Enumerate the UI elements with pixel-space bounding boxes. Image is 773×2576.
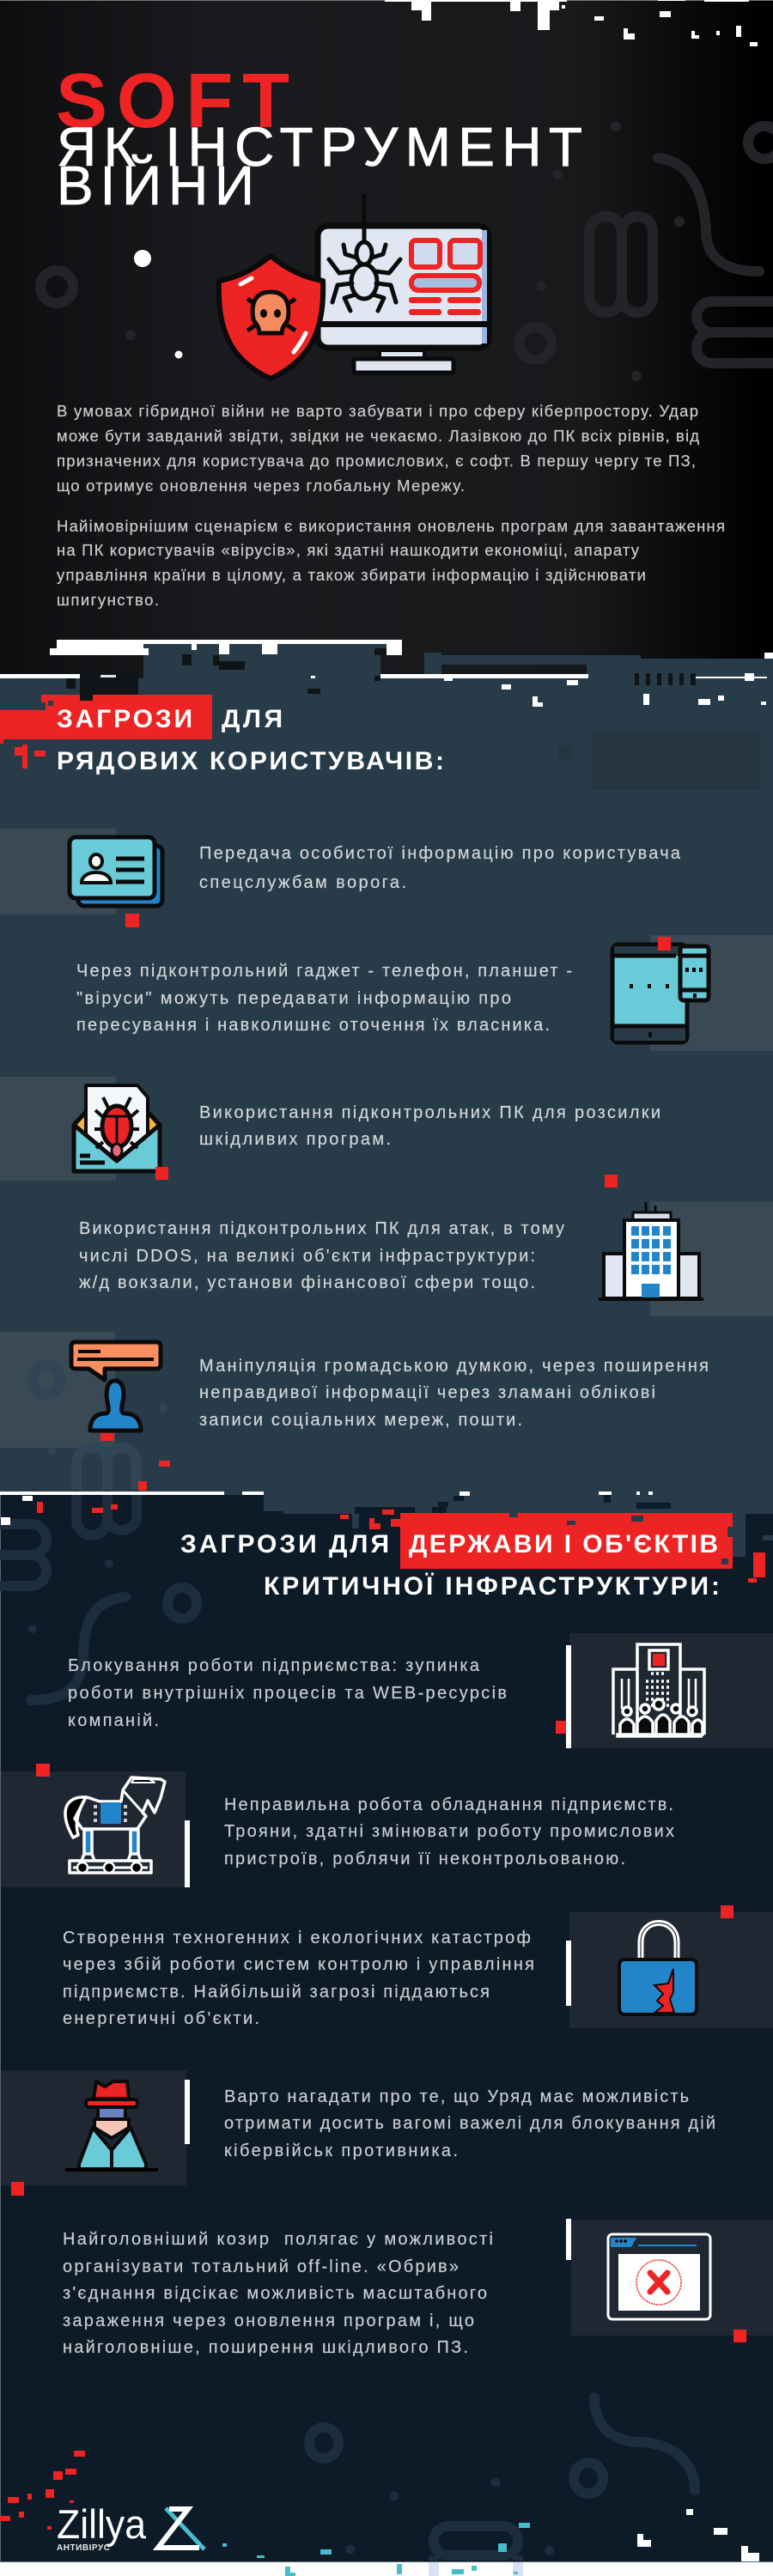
decorative pattern: intro (40, 121, 773, 381)
heading: threats for ordinary users: ЗАГРОЗИ (57, 705, 192, 733)
intro paragraph 2: управління країни в цілому, а також збирати інформацію і здійснювати (57, 566, 646, 584)
logo: Zillya: АНТИВІРУС (57, 2543, 110, 2553)
heading: threats for ordinary users (0, 695, 444, 775)
teal remnants right of red box (352, 1514, 773, 1557)
text (79, 1219, 564, 1292)
glitch pixels: bottom (0, 2451, 759, 2576)
heading: threats for state objects: ЗАГРОЗИ ДЛЯ (180, 1530, 389, 1558)
text (199, 1103, 660, 1149)
text (63, 1929, 534, 2028)
text: енергетичні об'єкти. (63, 2009, 259, 2028)
intro paragraph 2: на ПК користувачів «вірусів», які здатні нашкодити економіці, апарату (57, 541, 640, 559)
intro paragraph 1: призначених для користувача до промислових, є софт. В першу чергу те ПЗ, (57, 452, 696, 470)
title (56, 58, 582, 216)
section background: ordinary users (0, 644, 773, 1516)
red pixels (155, 1167, 618, 1188)
text (224, 2087, 715, 2160)
red pixel (658, 937, 671, 951)
decorative pattern: state section (0, 1495, 695, 2576)
panel: state threat 2 (1, 1764, 674, 1887)
intro paragraph 1: В умовах гібридної війни не варто забувати і про сферу кіберпростору. Удар (57, 402, 698, 420)
intro paragraph 2 (57, 517, 725, 609)
panel background: user threat 5 (0, 1332, 115, 1448)
intro paragraph 1 (57, 402, 699, 495)
title: ЯК ІНСТРУМЕНТ (57, 116, 582, 178)
section background: intro (0, 0, 773, 678)
page edge lines (0, 1495, 773, 2562)
panel: state threat 3 (63, 1905, 773, 2028)
panel: state threat 5 (63, 2219, 773, 2357)
text: підприємств. Найбільшій загрозі піддаються (63, 1983, 490, 2002)
icon: spy (65, 2081, 158, 2172)
icon: tablet and phone (612, 945, 709, 1042)
icon: shield with skull (219, 256, 323, 379)
section background: state threats (1, 1495, 773, 2561)
icon: spider (329, 196, 400, 311)
title: SOFT (56, 58, 289, 144)
text: Трояни, здатні змінювати роботу промислових (224, 1822, 674, 1841)
panel: user threat 2 (76, 935, 773, 1051)
text: Через підконтрольний гаджет - телефон, планшет - (76, 962, 572, 981)
text: Найголовніший козир полягає у можливості (63, 2230, 493, 2249)
icon: broken lock (619, 1923, 697, 2014)
intro paragraph 1: що отримує оновлення через глобальну Мережу. (57, 477, 465, 495)
text: пристроїв, роблячи її неконтрольованою. (224, 1850, 625, 1868)
text: Блокування роботи підприємства: зупинка (68, 1656, 480, 1675)
icon: office building (599, 1202, 703, 1301)
icon: blocked enterprise (613, 1644, 704, 1736)
text: зараження через оновлення програм і, що (63, 2312, 474, 2330)
text (199, 1357, 709, 1430)
text: Передача особистої інформацію про користувача (199, 844, 681, 863)
text: найголовніше, поширення шкідливого ПЗ. (63, 2338, 468, 2357)
text: Неправильна робота обладнання підприємств. (224, 1795, 673, 1814)
panel: user threat 3 (0, 1077, 660, 1181)
heading: threats for ordinary users: ДЛЯ (222, 705, 283, 733)
text (224, 1795, 674, 1868)
decorative pattern: section overlap (33, 1365, 167, 1535)
intro paragraph 1: може бути завданий звідти, звідки не чекаємо. Лазівкою до ПК всіх рівнів, від (57, 427, 699, 445)
icon: trojan horse (65, 1777, 165, 1873)
text (63, 2230, 493, 2357)
text: неправдивої інформації через зламані облікові (199, 1383, 655, 1402)
text: спецслужбам ворога. (199, 873, 406, 892)
heading: threats for state objects: КРИТИЧНОЇ ІНФРАСТРУКТУРИ: (264, 1572, 720, 1601)
heading: threats for state objects (180, 1513, 733, 1601)
logo: Zillya (57, 2501, 204, 2553)
glitch: state section transition (0, 1461, 765, 1583)
icon: envelope with bug (74, 1085, 160, 1171)
glitch: section transition (0, 640, 773, 790)
glitch pixels: top right (385, 0, 758, 46)
intro paragraph 2: Найімовірнішим сценарієм є використання оновлень програм для завантаження (57, 517, 725, 535)
red pixel (100, 1433, 114, 1441)
text: пересування і навколишнє оточення їх власника. (76, 1016, 550, 1035)
text: компаній. (68, 1711, 159, 1730)
text: Маніпуляція громадською думкою, через поширення (199, 1357, 709, 1376)
text: Створення техногенних і екологічних катастроф (63, 1929, 531, 1947)
title: ВІЙНИ (57, 154, 254, 216)
panel: user threat 5 (71, 1342, 709, 1441)
text: через збій роботи систем контролю і управління (63, 1955, 534, 1974)
icon: speech bubble and person (71, 1342, 161, 1431)
text (68, 1656, 507, 1730)
text: з'єднання відсікає можливість масштабного (63, 2284, 487, 2303)
text (76, 962, 572, 1035)
text: отримати досить вагомі важелі для блокування дій (224, 2114, 715, 2133)
text: ж/д вокзали, установи фінансової сфери тощо. (79, 1273, 535, 1292)
panel: state threat 1 (68, 1633, 773, 1748)
text: Використання підконтрольних ПК для атак, в тому (79, 1219, 564, 1238)
heading: threats for state objects: ДЕРЖАВИ І ОБ'ЄКТІВ (409, 1530, 718, 1558)
icon: browser error (608, 2234, 710, 2319)
white dots (134, 250, 182, 359)
red pixel (125, 914, 139, 927)
logo: Zillya: Zillya (57, 2501, 147, 2547)
icon: infected monitor (318, 196, 489, 373)
text: шкідливих програм. (199, 1130, 391, 1149)
panel: user threat 4 (79, 1201, 773, 1316)
heading: threats for ordinary users: РЯДОВИХ КОРИСТУВАЧІВ: (57, 747, 444, 775)
text: "віруси" можуть передавати інформацію про (76, 989, 511, 1008)
text: кібервійськ противника. (224, 2142, 458, 2160)
text: числі DDOS, на великі об'єкти інфраструктури: (79, 1247, 535, 1266)
panel: state threat 4 (1, 2070, 715, 2196)
panel: user threat 1 (0, 829, 681, 914)
text: організувати тотальний off-line. «Обрив» (63, 2257, 459, 2276)
text: записи соціальних мереж, пошти. (199, 1411, 522, 1430)
text: Використання підконтрольних ПК для розсилки (199, 1103, 660, 1122)
icon: id cards (70, 837, 162, 906)
text: Варто нагадати про те, що Уряд має можливість (224, 2087, 689, 2106)
text (199, 844, 681, 892)
text: роботи внутрішніх процесів та WEB-ресурсів (68, 1684, 507, 1703)
intro paragraph 2: шпигунство. (57, 591, 159, 609)
